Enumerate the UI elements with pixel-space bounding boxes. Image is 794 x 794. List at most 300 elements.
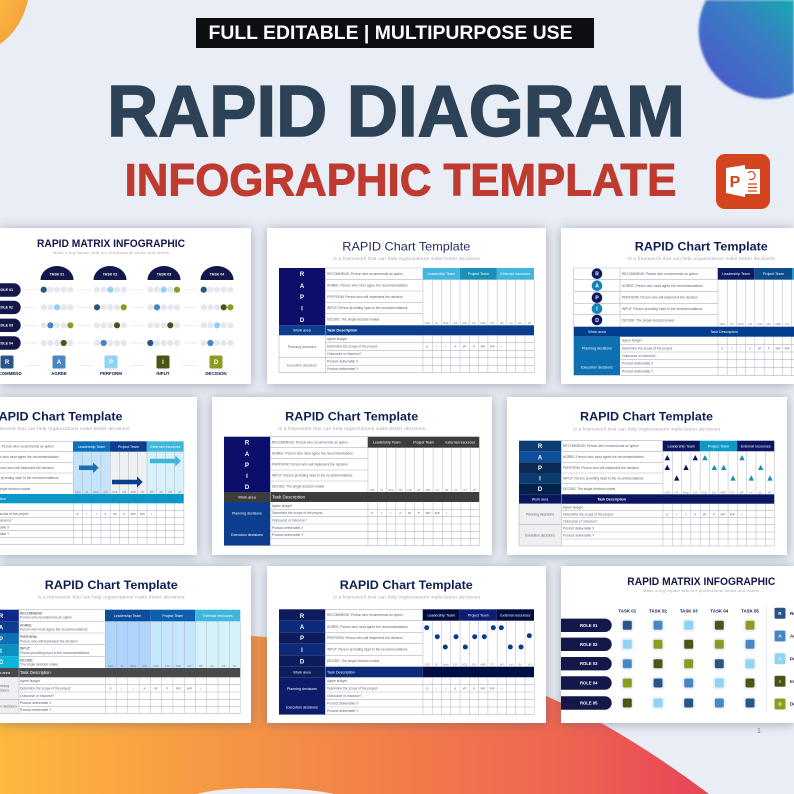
RAPID table: IR <box>435 322 438 325</box>
RAPID table: I/P <box>154 686 158 690</box>
RAPID table: P <box>713 512 715 516</box>
RAPID table: I <box>436 686 437 690</box>
task domes: TASK 03 <box>157 272 171 276</box>
RAPID table: DECIDE: The single decision maker <box>563 487 616 491</box>
RAPID table: AMP <box>775 323 781 326</box>
RAPID table: IR <box>86 491 88 494</box>
RAPID table: VCE <box>112 491 118 494</box>
RAPID table: INPUT: Person providing input to the recommendations <box>272 474 353 478</box>
matrix squares <box>623 621 754 708</box>
RAPID table <box>574 268 794 375</box>
RAPID table: DS <box>758 491 762 494</box>
title: RAPID DIAGRAM <box>107 71 685 152</box>
legend: I <box>162 360 164 366</box>
RAPID table: R/P <box>481 686 485 690</box>
slide title: RAPID Chart Template <box>342 240 471 254</box>
page number: 1 <box>757 728 761 735</box>
RAPID table: A <box>144 686 146 690</box>
legend: P <box>109 360 113 366</box>
RAPID table: CEO <box>75 491 80 494</box>
RAPID table: PERFORM: <box>20 635 37 639</box>
RAPID table: DS <box>518 322 522 325</box>
slide 9: RAPID matrix with squares <box>561 566 794 723</box>
RAPID table: Write <box>443 664 449 667</box>
RAPID table: CM <box>767 323 771 326</box>
RAPID table: I/P <box>463 686 466 690</box>
RAPID table: Determine the scope of the project <box>622 346 672 350</box>
RAPID table <box>279 268 534 373</box>
RAPID table: Leadership Team <box>373 440 400 444</box>
RAPID table: Person providing input to the recommendations <box>20 651 89 655</box>
legend: PERFORM <box>100 371 122 376</box>
RAPID table: AGREE: <box>20 623 33 627</box>
RAPID table: I <box>740 346 741 350</box>
RAPID table: D <box>595 318 599 324</box>
RAPID table: Write <box>443 322 449 325</box>
RAPID table: Work area <box>532 497 548 501</box>
legend: A <box>778 634 782 639</box>
RAPID table: INPUT: Person providing input to the recommendations <box>622 307 703 311</box>
banner: FULL EDITABLE | MULTIPURPOSE USE <box>208 23 572 44</box>
subtitle: INFOGRAPHIC TEMPLATE <box>125 156 676 206</box>
RAPID table: P <box>123 512 125 516</box>
RAPID table: Outsource or Insource? <box>272 518 307 522</box>
legend: P <box>778 656 782 661</box>
RAPID table: CIS <box>693 491 698 494</box>
RAPID table: DECIDE: The single decision maker <box>327 318 380 322</box>
RAPID table: The single decision maker <box>20 663 59 667</box>
RAPID table: VP <box>528 664 531 667</box>
RAPID table: MP <box>500 664 504 667</box>
RAPID table: R/P <box>131 512 136 516</box>
RAPID table: CIT <box>188 665 192 668</box>
triangles: leadership team <box>665 455 698 481</box>
RAPID table: CEO <box>425 664 430 667</box>
decoration: bottom white ellipse <box>197 788 334 794</box>
RAPID table: R/P <box>426 511 430 515</box>
RAPID table: Person who recommends an option <box>20 616 72 620</box>
role pills <box>561 619 612 710</box>
RAPID table: Task Description <box>710 330 738 334</box>
slide 3: RAPID chart with circle badges <box>561 228 794 384</box>
dot markers <box>424 625 532 650</box>
RAPID table: I <box>381 511 382 515</box>
RAPID table: I <box>731 346 732 350</box>
legend <box>0 356 227 376</box>
icon: PowerPoint: P <box>730 174 741 191</box>
RAPID table: Outsource or Insource? <box>327 352 362 356</box>
RAPID table: PERFORM: Person who will implement the decision <box>563 466 639 470</box>
RAPID table: Execution decisions <box>581 366 613 370</box>
slide title: RAPID MATRIX INFOGRAPHIC <box>37 238 185 250</box>
RAPID table: R/P <box>490 345 495 349</box>
RAPID table: PERFORM: Person who will implement the decision <box>327 636 403 640</box>
RAPID table: A <box>300 625 305 631</box>
legend: DECISION <box>205 371 227 376</box>
RAPID table: IR <box>121 665 123 668</box>
RAPID table: P <box>473 686 475 690</box>
RAPID table: MP <box>740 491 744 494</box>
RAPID table: D <box>300 660 305 666</box>
RAPID table: A <box>105 512 107 516</box>
RAPID table: Project Team <box>468 272 489 276</box>
RAPID table: Execution decisions <box>231 533 263 537</box>
task domes: TASK 01 <box>50 272 64 276</box>
RAPID table: R <box>300 614 305 620</box>
RAPID table: Product deliverable X <box>272 526 304 530</box>
RAPID table: VP <box>528 322 531 325</box>
role pills: ROLE 05 <box>580 700 598 706</box>
RAPID table: I <box>133 686 134 690</box>
decoration: top-right blue circle <box>699 0 794 99</box>
role pills <box>0 283 21 350</box>
RAPID table: Project Team <box>413 440 434 444</box>
RAPID table: IR <box>380 489 383 492</box>
RAPID table: Determine the scope of the project <box>563 512 613 516</box>
RAPID table: R <box>595 272 599 278</box>
RAPID table: Determine the scope of the project <box>327 686 377 690</box>
RAPID table: CIT <box>141 491 145 494</box>
slide subtitle: Is a framework that can help organizations make better decisions <box>333 256 481 262</box>
RAPID table: DECIDE: The single decision maker <box>622 319 675 323</box>
RAPID table <box>224 437 480 546</box>
RAPID table: AMP <box>480 322 486 325</box>
RAPID table: Work area <box>293 329 312 333</box>
RAPID table: Outsource or Insource? <box>563 519 598 523</box>
RAPID table: CEO <box>370 489 375 492</box>
RAPID table: R <box>300 272 305 278</box>
legend: D <box>214 360 219 366</box>
RAPID table: P <box>418 511 420 515</box>
slide subtitle: Make a big impact with our professional slides and charts <box>53 250 169 255</box>
RAPID table: CIS <box>453 322 458 325</box>
slide title: RAPID Chart Template <box>45 578 178 592</box>
RAPID table: VCE <box>462 322 467 325</box>
role pills: ROLE 03 <box>580 661 598 666</box>
RAPID table: CEO <box>665 491 670 494</box>
slide 8: RAPID chart with dots <box>267 566 546 723</box>
RAPID table: VCE <box>407 489 412 492</box>
RAPID table: D <box>371 511 373 515</box>
RAPID table: D <box>77 512 79 516</box>
RAPID table: Agree budget <box>20 679 40 683</box>
RAPID table: I <box>121 686 122 690</box>
RAPID table: CM <box>165 665 169 668</box>
RAPID table: AU <box>454 489 458 492</box>
RAPID table: Agree budget <box>272 504 292 508</box>
RAPID table: I <box>0 649 2 655</box>
task headers: TASK 05 <box>741 608 759 614</box>
RAPID table: MP <box>500 322 504 325</box>
RAPID table: MP <box>199 665 203 668</box>
RAPID table: D <box>426 345 428 349</box>
RAPID table: Execution decisions <box>286 706 318 710</box>
legend: D <box>778 702 782 707</box>
RAPID table: AU <box>749 491 753 494</box>
RAPID table: DS <box>518 664 522 667</box>
RAPID table: Task Description <box>20 670 51 675</box>
RAPID table: CM <box>712 491 716 494</box>
RAPID table: I/P <box>703 512 706 516</box>
RAPID table: INPUT: Person providing input to the recommendations <box>563 476 644 480</box>
grey dots <box>44 290 231 343</box>
connector lines <box>24 290 197 366</box>
RAPID table: AMP <box>425 489 431 492</box>
RAPID table: DS <box>463 489 467 492</box>
slide title: RAPID Chart Template <box>340 578 473 592</box>
RAPID table: VP <box>178 491 182 494</box>
RAPID table: AGREE: Person who must agree the recommendations <box>327 283 408 287</box>
RAPID table: Determine the scope of the project <box>272 511 322 515</box>
RAPID table: IR <box>675 491 678 494</box>
task headers: TASK 02 <box>649 608 667 614</box>
RAPID table: P <box>300 636 304 642</box>
coloured dots <box>41 287 233 346</box>
RAPID table: R/P <box>176 686 181 690</box>
slide subtitle: Is a framework that can help organizations make better decisions <box>38 595 185 601</box>
triangles: project and external teams <box>702 455 773 481</box>
RAPID table: Outsource or Insource? <box>20 694 55 698</box>
RAPID table: CIS <box>103 491 108 494</box>
RAPID table: AU <box>210 665 214 668</box>
RAPID table: DS <box>169 491 172 494</box>
RAPID table: RECOMMEND: Person who recommends an option <box>272 440 348 444</box>
slide 5: RAPID chart, dark headers <box>212 397 492 555</box>
RAPID table: External resources <box>500 272 531 276</box>
RAPID table: MP <box>150 491 154 494</box>
RAPID table: Work area <box>238 496 257 500</box>
RAPID table: Product deliverable X <box>20 701 52 705</box>
slide title: RAPID Chart Template <box>580 410 713 424</box>
RAPID table: Work area <box>293 670 312 674</box>
RAPID table: I <box>685 512 686 516</box>
RAPID table: AGREE: Person who must agree the recommendations <box>563 455 644 459</box>
RAPID table: I <box>301 648 303 654</box>
RAPID table: VCE <box>462 664 467 667</box>
RAPID table: R <box>538 444 543 450</box>
RAPID table: External resources <box>500 613 531 617</box>
RAPID table: D <box>666 512 668 516</box>
RAPID table <box>519 441 775 546</box>
RAPID table: I/P <box>758 346 761 350</box>
RAPID table: R/P <box>140 512 145 516</box>
RAPID table: INPUT: <box>20 647 31 651</box>
decoration: bottom gradient wave <box>0 636 709 794</box>
RAPID table: Leadership Team <box>114 614 141 618</box>
RAPID table: I <box>445 345 446 349</box>
RAPID table: I <box>501 686 502 690</box>
RAPID table: Write <box>130 665 137 668</box>
RAPID table: I <box>596 306 598 312</box>
RAPID table: CIT <box>785 323 790 326</box>
RAPID table: A <box>399 511 401 515</box>
RAPID table: R/P <box>481 345 485 349</box>
RAPID table: RECOMMEND: Person who recommends an option <box>327 272 403 276</box>
RAPID table: Leadership Team <box>427 613 455 617</box>
RAPID table: I <box>96 512 97 516</box>
RAPID table: Planning decisions <box>287 687 317 691</box>
arrow: project team <box>112 476 143 488</box>
RAPID table: DS <box>222 665 225 668</box>
RAPID table: IR <box>435 664 438 667</box>
RAPID table: MP <box>445 489 449 492</box>
RAPID table: AGREE: Person who must agree the recommendations <box>622 284 703 288</box>
RAPID table: Person who must agree the recommendations <box>20 628 88 632</box>
RAPID table: RECOMMEND: Person who recommends an option <box>327 613 403 617</box>
RAPID table: Leadership Team <box>722 272 750 276</box>
RAPID table: Product deliverable X <box>622 362 654 366</box>
RAPID table: Person who will implement the decision <box>20 639 78 643</box>
RAPID table: DECIDE: <box>20 658 33 662</box>
RAPID table: I <box>200 686 201 690</box>
RAPID table: CM <box>472 322 476 325</box>
legend: R <box>778 611 782 616</box>
RAPID table: CIS <box>453 664 458 667</box>
RAPID table: P <box>473 345 475 349</box>
RAPID table: Product deliverable X <box>327 701 359 705</box>
RAPID table: AU <box>159 491 163 494</box>
slide subtitle: Is a framework that can help organizations make better decisions <box>278 426 426 432</box>
RAPID table: I/P <box>113 512 117 516</box>
RAPID table: PERFORM: Person who will implement the decision <box>272 462 348 466</box>
RAPID table: Product deliverable Y <box>327 367 359 371</box>
RAPID table: Leadership Team <box>427 272 455 276</box>
RAPID table: R/P <box>187 686 192 690</box>
RAPID table: I <box>676 512 677 516</box>
RAPID table: CEO <box>425 322 430 325</box>
RAPID table: D <box>110 686 112 690</box>
RAPID table: CIT <box>490 322 495 325</box>
slide subtitle: Is a framework that can help organizations make better decisions <box>573 426 721 432</box>
RAPID table: I <box>741 512 742 516</box>
RAPID table: CIS <box>398 489 403 492</box>
RAPID table: P <box>245 463 249 469</box>
RAPID table: Agree budget <box>622 339 642 343</box>
RAPID table: I <box>445 686 446 690</box>
RAPID table: P <box>538 466 542 472</box>
arrow: leadership team <box>79 462 99 473</box>
RAPID table: I <box>301 306 303 312</box>
RAPID table: PERFORM: Person who will implement the decision <box>327 295 403 299</box>
RAPID table: PERFORM: Person who will implement the decision <box>622 296 698 300</box>
RAPID table: AMP <box>480 664 486 667</box>
legend <box>774 608 794 710</box>
slide title: RAPID Chart Template <box>285 410 419 424</box>
task domes: TASK 04 <box>210 272 224 276</box>
RAPID table: A <box>454 345 456 349</box>
RAPID table: Project Team <box>162 614 183 618</box>
RAPID table: External resources <box>203 614 233 618</box>
slide subtitle: Is a framework that can help organizations make better decisions <box>628 256 775 262</box>
task headers: TASK 01 <box>618 608 637 614</box>
slide subtitle: Is a framework that can help organizations make better decisions <box>333 595 481 601</box>
RAPID table: Write <box>93 491 100 494</box>
slide title: RAPID MATRIX INFOGRAPHIC <box>627 576 775 588</box>
RAPID table: AMP <box>720 491 726 494</box>
RAPID table: A <box>245 452 250 458</box>
RAPID table: Planning decisions <box>526 512 554 516</box>
arrow: external resources <box>150 456 181 466</box>
RAPID table: Product deliverable X <box>327 360 359 364</box>
RAPID table: Agree budget <box>327 679 347 683</box>
RAPID table: Planning decisions <box>232 512 262 516</box>
legend: AGREE <box>51 371 67 376</box>
RAPID table: INPUT: Person providing input to the recommendations <box>327 648 408 652</box>
RAPID table: P <box>595 296 599 302</box>
RAPID table: R/P <box>490 686 495 690</box>
RAPID table: D <box>721 346 723 350</box>
RAPID table: Product deliverable Y <box>327 709 359 713</box>
RAPID table: Outsource or Insource? <box>327 694 362 698</box>
RAPID table: Task Description <box>597 497 626 501</box>
RAPID table: Planning decisions <box>288 345 316 349</box>
slide subtitle: Make a big impact with our professional slides and charts <box>643 588 759 593</box>
RAPID table: CIT <box>490 664 495 667</box>
RAPID table <box>0 610 241 713</box>
RAPID table: I <box>446 511 447 515</box>
RAPID table: External resources <box>741 444 771 448</box>
banner <box>196 18 594 48</box>
RAPID table: CIT <box>435 489 440 492</box>
RAPID table: R/P <box>776 346 780 350</box>
RAPID table: I <box>390 511 391 515</box>
RAPID table: Task Description <box>327 670 355 674</box>
role pills: ROLE 01 <box>580 623 598 628</box>
RAPID table: Project Team <box>763 272 784 276</box>
RAPID table: RECOMMEND: <box>20 611 43 615</box>
RAPID table: I/P <box>463 345 466 349</box>
RAPID table: Agree budget <box>563 505 583 509</box>
RAPID table: Execution decisions <box>525 534 555 538</box>
RAPID table: CM <box>472 664 476 667</box>
RAPID table: P <box>768 346 770 350</box>
RAPID table: AGREE: Person who must agree the recommendations <box>272 451 353 455</box>
slide 1: RAPID matrix with task domes <box>0 228 251 384</box>
legend: I <box>779 679 781 684</box>
task domes: TASK 02 <box>103 272 117 276</box>
RAPID table: Determine the scope of the project <box>327 345 377 349</box>
RAPID table: R/P <box>721 512 725 516</box>
RAPID table: CIS <box>748 323 753 326</box>
decoration: top-left orange blob <box>0 0 28 44</box>
RAPID table: Task Description <box>327 329 358 333</box>
RAPID table: Outsource or Insource? <box>622 354 657 358</box>
RAPID table: Project Team <box>708 444 729 448</box>
RAPID table: CM <box>417 489 421 492</box>
RAPID table: D <box>300 318 305 324</box>
RAPID table: Product deliverable Y <box>20 708 52 712</box>
RAPID table: DECIDE: The single decision maker <box>327 659 380 663</box>
RAPID table: A <box>749 346 751 350</box>
RAPID table: I <box>539 476 541 482</box>
RAPID table: CEO <box>720 323 725 326</box>
RAPID table: CEO <box>108 665 113 668</box>
RAPID table: I <box>436 345 437 349</box>
RAPID table: A <box>454 686 456 690</box>
RAPID table: CIT <box>730 491 735 494</box>
RAPID table: Execution decisions <box>287 364 317 368</box>
RAPID table: External resources <box>445 440 475 444</box>
RAPID table: P <box>300 295 304 301</box>
RAPID table: AGREE: Person who must agree the recommendations <box>327 625 408 629</box>
RAPID table: External resources <box>150 445 180 449</box>
task headers: TASK 03 <box>680 608 698 614</box>
legend: INPUT <box>156 371 170 376</box>
RAPID table: Product deliverable Y <box>563 534 595 538</box>
RAPID table: Work area <box>588 330 607 334</box>
RAPID table: VCE <box>153 665 159 668</box>
slide 2: RAPID chart, blue <box>267 228 546 384</box>
